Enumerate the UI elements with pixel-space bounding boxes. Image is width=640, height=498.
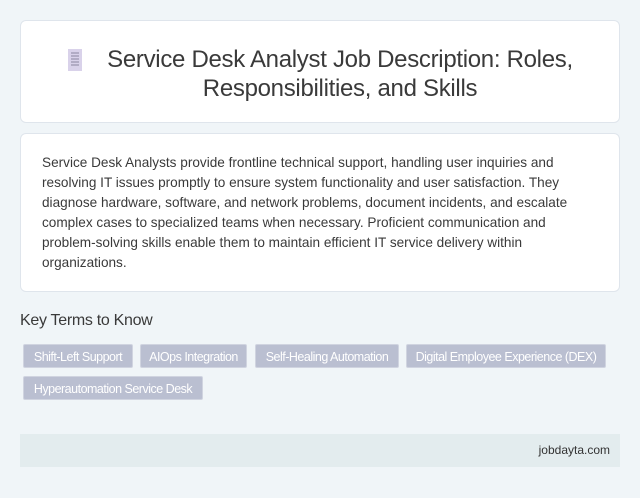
icon: document [68,49,82,71]
description card [20,133,620,292]
tags: Self-Healing Automation [266,350,388,364]
tags: AIOps Integration [149,350,238,364]
description text: Service Desk Analysts provide frontline technical support, handling user inquiries and resolving IT issues promptly to ensure system functionality and user satisfaction. They diagnose hardware, software, and network problems, document incidents, and escalate complex cases to specialized teams when necessary. Proficient communication and problem-solving skills enable them to maintain efficient IT service delivery within organizations. [42,155,567,270]
key terms heading: Key Terms to Know [20,312,152,329]
footer: jobdayta.com [539,443,610,457]
header card [20,20,620,123]
tags: Hyperautomation Service Desk [34,382,192,396]
footer [20,434,620,467]
title: Service Desk Analyst Job Description: Roles, Responsibilities, and Skills [107,46,573,102]
tags: Shift-Left Support [34,350,122,364]
tags: Digital Employee Experience (DEX) [416,350,596,364]
